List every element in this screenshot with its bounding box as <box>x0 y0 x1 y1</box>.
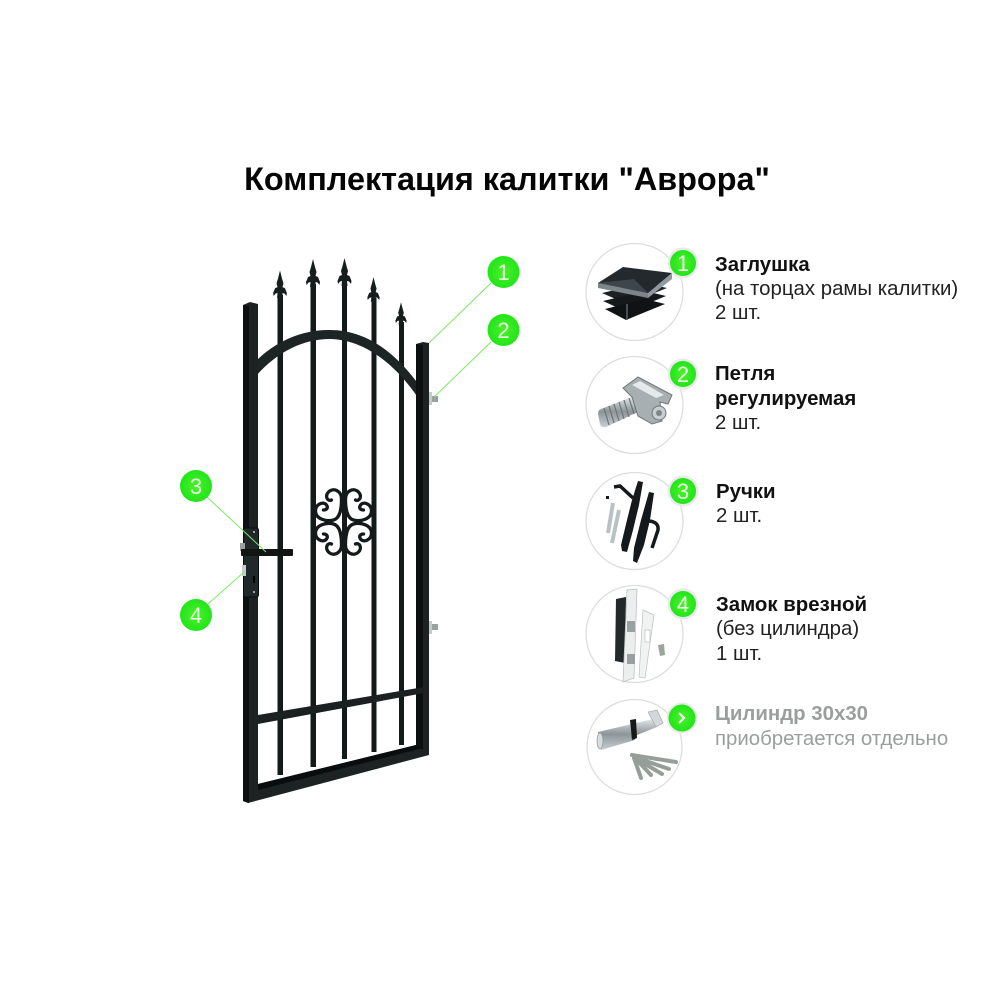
text: end cap: (на торцах рамы калитки) <box>715 278 958 300</box>
text: end cap: Заглушка <box>715 254 810 276</box>
handle and lock plate <box>240 528 293 597</box>
text: mortise lock: Замок врезной <box>716 594 867 616</box>
icon: handles <box>586 472 683 570</box>
spear bars <box>278 282 404 775</box>
callout 3 on gate <box>180 470 212 502</box>
upper hinge <box>429 392 438 405</box>
icon: end cap <box>586 244 683 340</box>
callout 2 on gate: 2 <box>497 318 510 343</box>
badge 1 <box>668 248 698 278</box>
text: mortise lock: 1 шт. <box>716 643 762 665</box>
lower cross rail <box>258 687 424 724</box>
text: hinge: регулируемая <box>715 388 856 410</box>
text: cylinder: приобретается отдельно <box>715 728 948 750</box>
icon: mortise lock <box>586 586 683 682</box>
badge 4: 4 <box>677 592 689 617</box>
badge 2: 2 <box>677 362 689 387</box>
item 4: mortise lock <box>586 586 867 682</box>
text: mortise lock: (без цилиндра) <box>716 618 859 640</box>
text: end cap: 2 шт. <box>715 302 761 324</box>
badge 2 <box>668 358 698 390</box>
badge 4 <box>668 588 698 620</box>
gate illustration <box>240 258 438 803</box>
badge 3 <box>668 476 698 506</box>
callout 4 on gate <box>180 599 212 631</box>
item 3: handles <box>586 472 776 570</box>
lower hinge <box>429 621 438 634</box>
text: handles <box>716 481 776 527</box>
text: mortise lock <box>716 594 867 665</box>
callout 3 on gate: 3 <box>190 474 202 499</box>
callout 4 on gate: 4 <box>190 603 202 628</box>
text: hinge <box>715 363 856 434</box>
text: handles: Ручки <box>716 481 776 503</box>
text: hinge: 2 шт. <box>715 412 761 434</box>
frame <box>243 302 429 803</box>
text: handles: 2 шт. <box>716 505 762 527</box>
badge 1: 1 <box>677 251 689 276</box>
spear tips <box>273 258 407 325</box>
item 5: cylinder <box>587 700 948 794</box>
badge: arrow <box>666 702 698 734</box>
icon: cylinder <box>587 700 682 794</box>
item 1: end cap <box>586 244 958 340</box>
callout 2 on gate <box>488 314 520 346</box>
text: cylinder: Цилиндр 30х30 <box>715 703 868 725</box>
leader lines <box>207 283 491 604</box>
scroll ornament <box>316 490 372 554</box>
text: end cap <box>715 254 958 324</box>
badge 3: 3 <box>677 479 689 504</box>
callout 1 on gate <box>488 256 520 288</box>
callout 1 on gate: 1 <box>497 260 510 285</box>
text: cylinder <box>715 703 948 750</box>
item 2: hinge <box>586 356 856 454</box>
title: Комплектация калитки "Аврора" <box>244 161 770 197</box>
text: hinge: Петля <box>715 363 775 385</box>
icon: hinge <box>586 356 683 454</box>
arch <box>256 330 424 402</box>
